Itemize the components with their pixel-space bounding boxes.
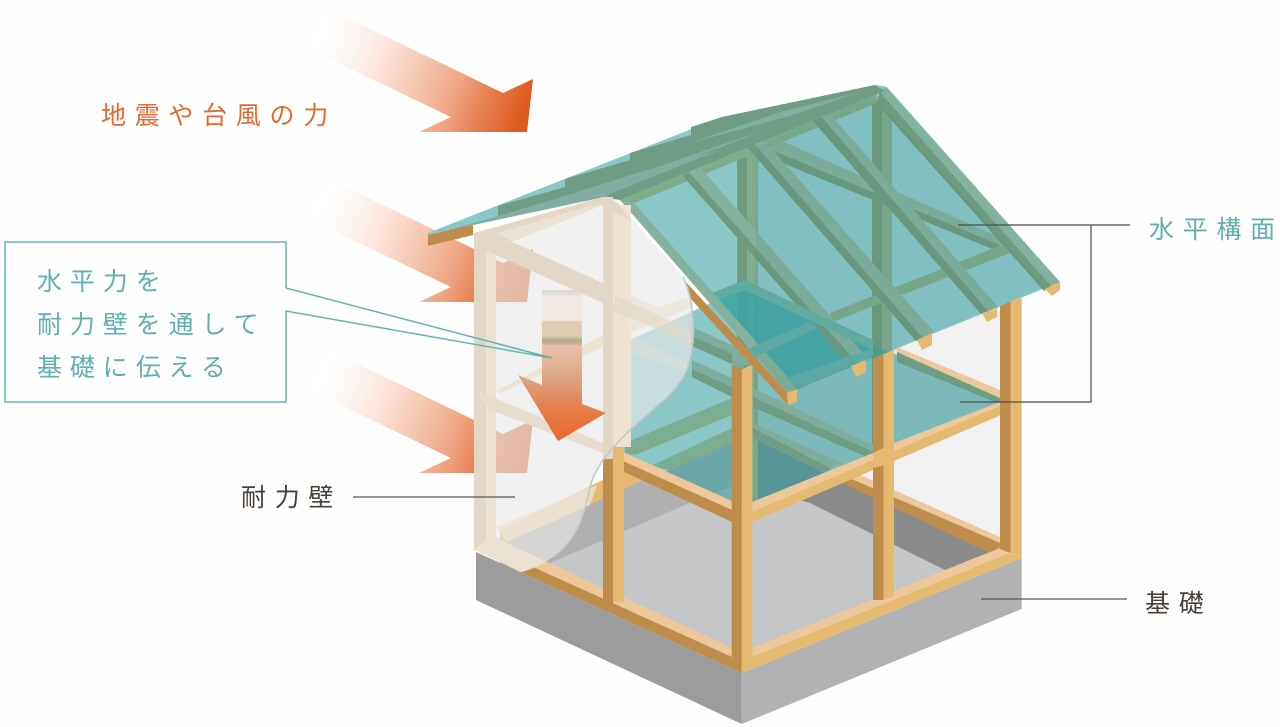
- top wall girt: [474, 232, 603, 303]
- rafter 3: [747, 139, 934, 341]
- tint of rear wall seen through plane: [753, 95, 1045, 506]
- middle wall girt: [480, 392, 603, 453]
- callout: horizontal force text box: [5, 242, 552, 402]
- roof framing under roof pane: [620, 87, 1060, 392]
- rafter 4: [812, 114, 999, 314]
- wall post left: [474, 233, 496, 551]
- near rafter side and end cap: [685, 281, 797, 405]
- rear wall frame: [500, 100, 1005, 553]
- front-left second floor girt: [603, 452, 732, 522]
- upper right rising band: [625, 295, 692, 335]
- green floor beams seen through plane: [625, 280, 1000, 472]
- post head joints: [873, 443, 894, 468]
- post cap: front corner: [732, 351, 752, 369]
- post: left wall middle: [603, 440, 624, 605]
- post: right wall middle: [873, 350, 894, 600]
- timber frame: posts: [603, 297, 1022, 673]
- front-right sill: [742, 548, 1022, 673]
- horizontal diaphragm: second floor plane: [615, 285, 1005, 510]
- label: foundation: 基礎: [1145, 590, 1212, 618]
- foundation: [476, 552, 1022, 724]
- callout text line 2: 耐力壁を通して: [37, 311, 267, 339]
- roof pane: near slope: [620, 85, 1060, 392]
- leader: horizontal diaphragm bracket: [958, 225, 1130, 402]
- gable top beam: [474, 197, 631, 242]
- rafter 5: [876, 87, 1060, 291]
- roof pane: far slope: [428, 85, 885, 236]
- label: horizontal diaphragm: 水平構面: [1149, 216, 1280, 244]
- downward arrow: transmitted force: [518, 290, 606, 441]
- floor slab and shadows: [495, 425, 1012, 665]
- rising lower band of wall: [496, 485, 597, 542]
- callout text line 1: 水平力を: [37, 268, 169, 296]
- wall post middle: [603, 197, 631, 459]
- arrow: upper external force: [305, 8, 533, 132]
- sheet edge outline: [553, 277, 693, 557]
- leader: foundation: [981, 598, 1127, 600]
- arrow: lower external force: [305, 349, 533, 473]
- timber frame: sills and girts: [500, 398, 1022, 673]
- eave of far slope: [428, 225, 473, 246]
- heading: force label: 地震や台風の力: [101, 102, 337, 130]
- sill of wall: [474, 538, 545, 572]
- faded bearing wall sheet: [474, 197, 693, 572]
- post: front corner: [732, 365, 752, 673]
- arrow: middle external force: [305, 178, 533, 302]
- rafter end caps: [851, 282, 1060, 377]
- front-left sill: [500, 540, 742, 673]
- front-right second floor girt: [752, 398, 1010, 522]
- label: bearing wall: 耐力壁: [241, 484, 342, 512]
- upper right descending band: [613, 295, 693, 345]
- rear wall panel: [753, 304, 1005, 547]
- rafter 2: [682, 167, 868, 366]
- rafter 1: [620, 200, 799, 392]
- leader: bearing wall: [353, 496, 515, 498]
- faded bearing wall frame: [474, 197, 693, 572]
- lower right faint band: [631, 335, 687, 372]
- callout text line 3: 基礎に伝える: [37, 354, 234, 382]
- post: right corner: [1000, 297, 1022, 558]
